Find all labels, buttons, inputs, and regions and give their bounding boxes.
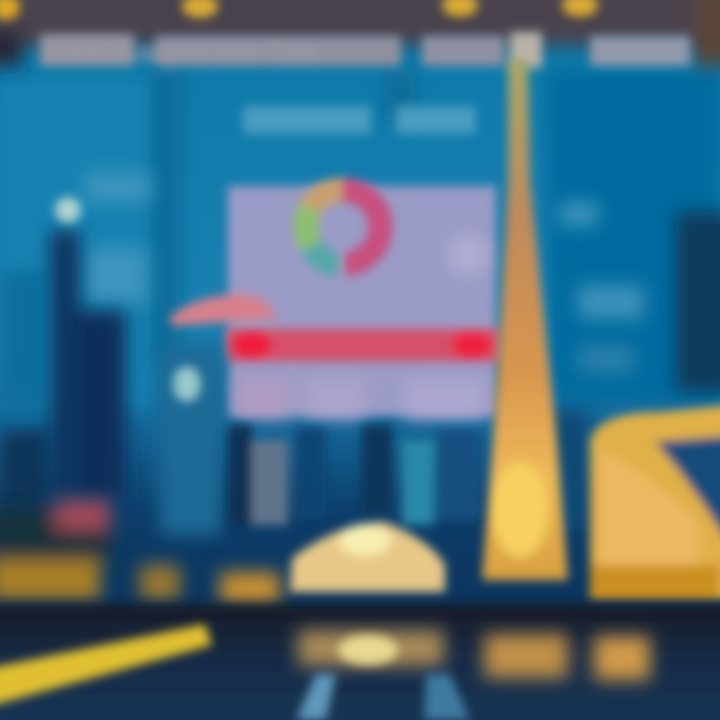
reflection highlight xyxy=(338,635,398,665)
road xyxy=(0,604,720,720)
road reflections xyxy=(298,630,650,680)
subtitle xyxy=(243,106,476,134)
panel highlights xyxy=(235,235,488,418)
red banner xyxy=(226,329,500,361)
title xyxy=(40,32,690,69)
burj tower xyxy=(482,60,568,580)
centre towers xyxy=(228,425,480,525)
light road lines xyxy=(296,674,470,720)
mid-left tower xyxy=(160,345,222,535)
right dark tower xyxy=(676,212,720,392)
central panel xyxy=(228,186,496,416)
yellow light streak xyxy=(0,624,212,706)
central pavilion xyxy=(290,522,445,592)
left tower lamp xyxy=(55,197,81,223)
left dark ground with warm lights xyxy=(0,500,280,604)
left tower xyxy=(50,230,126,500)
side text blocks xyxy=(85,172,644,373)
right gold building xyxy=(590,405,720,600)
title: UAE Corporate Tax xyxy=(44,36,317,69)
header band xyxy=(0,0,720,66)
donut chart xyxy=(306,190,381,266)
header lights xyxy=(0,0,598,20)
pink swoosh xyxy=(168,294,278,326)
mid-left tower lamp xyxy=(173,366,201,402)
background tower stripes xyxy=(0,70,720,530)
